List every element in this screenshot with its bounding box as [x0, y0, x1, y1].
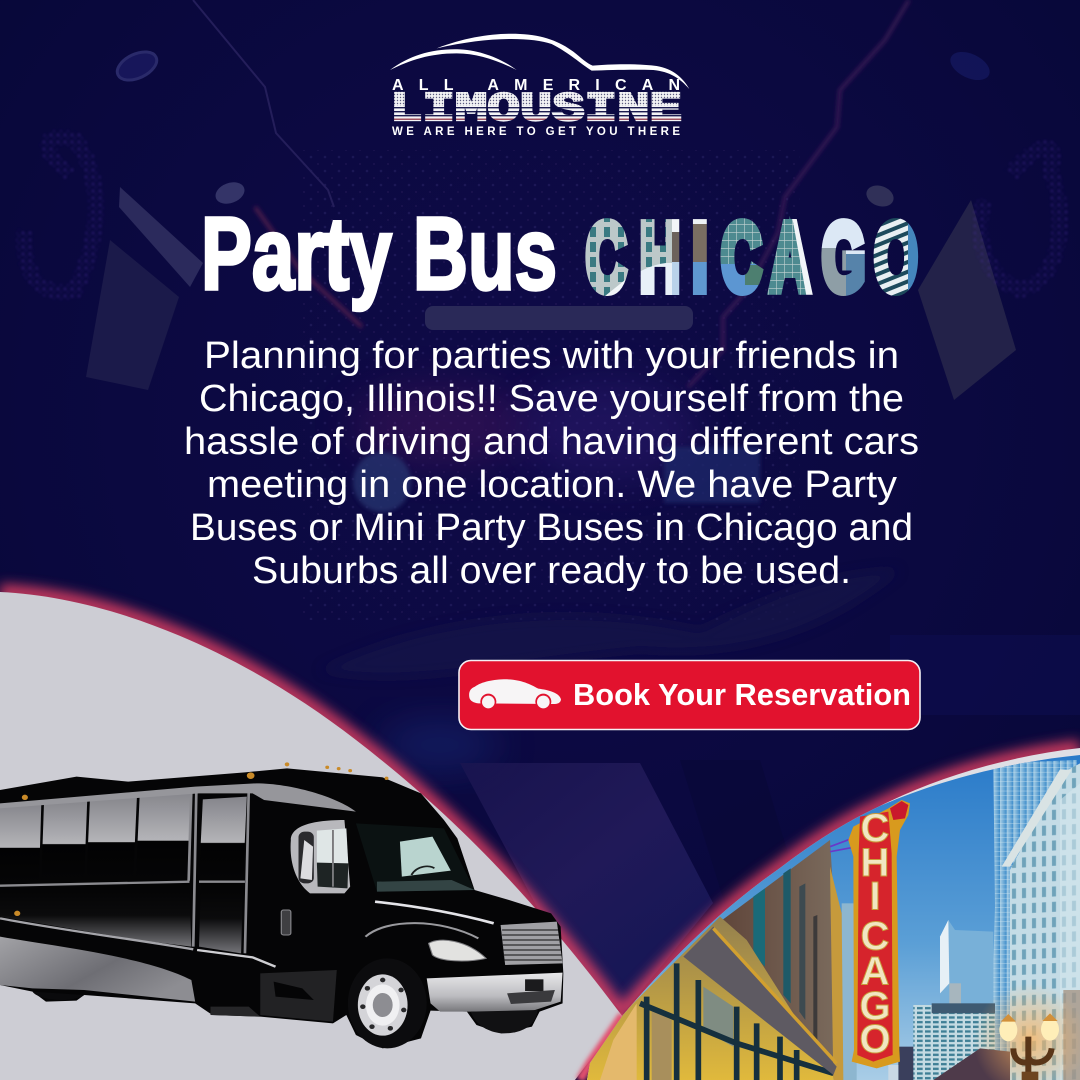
theatre sign: G — [859, 984, 891, 1028]
accent: pink strip beside photo — [580, 1015, 623, 1080]
button label: Book Your Reservation — [573, 677, 911, 712]
grille — [501, 922, 563, 965]
rear wheel — [33, 992, 84, 1000]
body paragraph: hassle of driving and having different cars — [184, 421, 919, 463]
panel: grey bus backdrop — [0, 592, 623, 1080]
body paragraph: meeting in one location. We have Party — [207, 464, 897, 506]
headlight — [429, 940, 486, 961]
low-rise buildings — [888, 1003, 995, 1080]
icon: car — [469, 679, 561, 710]
cab window — [356, 823, 475, 892]
theatre sign: H — [861, 841, 889, 885]
photo: party bus — [0, 762, 563, 1048]
theatre sign: C — [861, 914, 889, 958]
sky — [580, 740, 1080, 1080]
street lamp — [973, 983, 1080, 1080]
logo: tagline: WE ARE HERE TO GET YOU THERE — [392, 126, 680, 138]
title: CHICAGO image-filled letters — [585, 216, 918, 296]
logo: All American Limousine — [385, 34, 690, 138]
distant building — [842, 903, 857, 1080]
bus silhouette — [0, 768, 563, 1048]
logo: LIMOUSINE lettering — [394, 92, 682, 122]
passenger windows — [0, 792, 247, 884]
logo: ALL AMERICAN: ALL AMERICAN — [392, 77, 680, 94]
far wheel — [471, 1010, 538, 1033]
body paragraph: Suburbs all over ready to be used. — [252, 550, 851, 592]
chrome roof band — [0, 783, 356, 812]
storefront frieze — [683, 927, 837, 1075]
theatre sign: C — [861, 807, 889, 851]
theatre sign — [830, 800, 910, 1068]
body paragraph — [184, 335, 919, 592]
button: Book Your Reservation — [459, 660, 920, 730]
body paragraph: Planning for parties with your friends in — [204, 335, 899, 377]
theatre sign: O — [859, 1018, 891, 1062]
title: Party Bus Chicago — [204, 216, 918, 312]
brick building — [713, 840, 835, 1080]
body paragraph: Chicago, Illinois!! Save yourself from the — [199, 378, 904, 420]
lower side panels — [0, 883, 337, 1022]
curve glow: pink edges — [0, 592, 1080, 1017]
panel: light edge behind Chicago photo — [587, 748, 1080, 1080]
body paragraph: Buses or Mini Party Buses in Chicago and — [190, 507, 913, 549]
theatre sign: I — [869, 874, 881, 918]
side mirror and side window — [291, 820, 350, 893]
office building — [1002, 763, 1080, 1080]
glass tower — [993, 760, 1077, 1052]
street-level shops — [933, 1048, 1010, 1080]
title: Party Bus: Party Bus — [201, 196, 557, 311]
photo: Chicago street and theatre sign — [580, 740, 1080, 1080]
hood highlights — [365, 902, 494, 938]
bumper — [427, 973, 563, 1012]
front wheel — [348, 958, 427, 1048]
theatre sign: A — [861, 949, 889, 993]
logo: car silhouette swoosh — [390, 34, 689, 89]
door handle — [281, 910, 291, 935]
storefront glass — [580, 917, 833, 1080]
window trim and door frame — [0, 790, 249, 953]
golden facade — [830, 867, 843, 1080]
mid tower — [940, 920, 993, 1007]
amber marker lights — [14, 762, 388, 916]
